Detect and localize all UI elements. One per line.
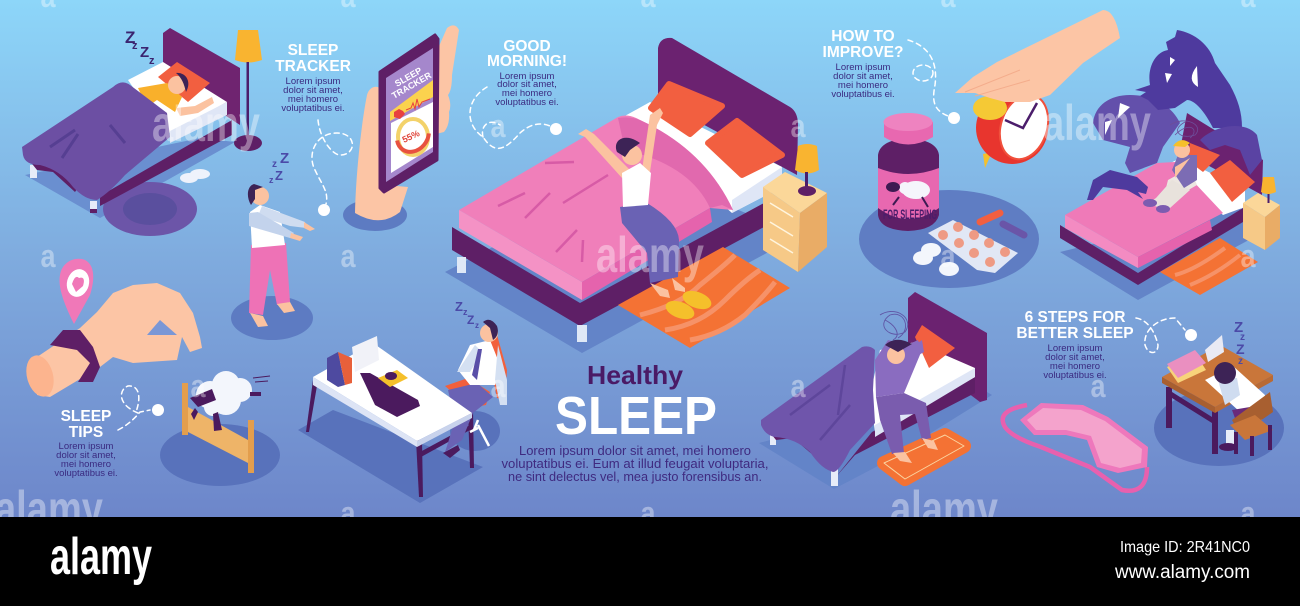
blanket: [761, 346, 875, 472]
title body text: Lorem ipsum dolor sit amet, mei homero: [519, 444, 751, 458]
heading: six steps: mei homero: [1050, 361, 1100, 372]
chair: [1230, 392, 1273, 456]
mattress: [870, 342, 975, 437]
title body text: ne sint delectus vel, mea justo forensibus an.: [508, 470, 762, 484]
zzz: Z: [280, 150, 289, 167]
heading: good morning: Lorem ipsum: [500, 71, 555, 82]
headboard: [163, 28, 240, 125]
illustration: sleeping pills bottle: [859, 113, 1039, 288]
heading: six steps: 6 STEPS FOR: [1025, 309, 1125, 326]
watermarks: a: [190, 368, 206, 404]
title: [502, 360, 768, 484]
mattress: [128, 62, 227, 143]
heading: good morning: mei homero: [502, 88, 552, 99]
heading: sleep tracker: [275, 42, 351, 114]
zzz: Z: [140, 44, 149, 61]
heading: how to improve: mei homero: [838, 80, 888, 91]
bed legs: [30, 165, 97, 213]
sheep: [190, 371, 270, 431]
title body text: [502, 444, 768, 484]
heading: six steps: voluptatibus ei.: [1043, 370, 1107, 381]
bottle: [878, 113, 939, 231]
dot: [318, 204, 330, 216]
illustration: sleep mask: [1003, 403, 1148, 491]
watermarks: a: [340, 495, 356, 531]
finger gap: [147, 320, 177, 335]
chair base: [470, 420, 489, 446]
blanket: [459, 116, 733, 300]
illustration: student asleep at desk: [1154, 319, 1284, 466]
zzz: z: [1238, 356, 1243, 367]
heading: good morning: MORNING!: [487, 53, 567, 70]
illustration: sheep jumping fence: [160, 371, 280, 486]
nightstand: [763, 172, 827, 272]
watermarks: a: [1090, 368, 1106, 404]
zzz: Z: [1234, 319, 1243, 336]
hand: [37, 283, 202, 397]
pillow: [915, 325, 955, 368]
rug: [103, 182, 197, 236]
rug: [618, 247, 790, 348]
heading: sleep tracker: TRACKER: [275, 58, 351, 75]
phone: [380, 35, 438, 192]
heading: sleep tips: [54, 408, 118, 479]
clock foot: [983, 152, 992, 168]
frame: [1060, 208, 1243, 285]
bedside lamp: [795, 144, 819, 196]
illustration: woman waking on big bed: [445, 38, 827, 353]
scribble: [880, 311, 908, 340]
zzz: z: [463, 307, 468, 317]
watermarks: a: [640, 495, 656, 531]
map pin: [60, 259, 93, 324]
calendar: [1205, 335, 1224, 362]
trousers: [249, 243, 290, 315]
bed frame: [100, 120, 232, 206]
mask inner: [1027, 408, 1142, 468]
blanket: [1065, 162, 1223, 268]
desk top: [1162, 345, 1273, 413]
laptop: [360, 373, 420, 417]
band: [50, 330, 100, 382]
tablets: [913, 243, 959, 276]
lamp: [1261, 177, 1276, 203]
bottle: FOR SLEEPING: [883, 206, 937, 222]
scribble: [1170, 121, 1198, 138]
bed frame: [452, 203, 764, 326]
footer logo: alamy: [50, 528, 152, 586]
watermarks: alamy: [596, 227, 704, 283]
heading: sleep tips: voluptatibus ei.: [54, 468, 118, 479]
watermarks: alamy: [152, 96, 260, 152]
zzz: [269, 150, 289, 185]
zzz: [1234, 319, 1245, 367]
zzz: z: [1240, 332, 1245, 343]
illustration: restless man on bed: [759, 292, 992, 489]
monster: [1135, 30, 1242, 128]
heading: sleep tips: TIPS: [69, 424, 103, 441]
blanket: [22, 82, 170, 200]
zzz: z: [269, 175, 274, 185]
frame under blanket: [25, 155, 90, 192]
zzz: [125, 28, 155, 67]
heading: six steps: Lorem ipsum: [1048, 343, 1103, 354]
dot: [948, 112, 960, 124]
watermarks: alamy: [1043, 95, 1151, 151]
wrist end: [22, 352, 58, 400]
monster arm: [1200, 126, 1262, 175]
heading: six steps: dolor sit amet,: [1045, 352, 1105, 363]
illustration: alarm clock and hand: [955, 10, 1120, 168]
zzz: z: [475, 321, 479, 330]
desk legs: [306, 380, 474, 497]
illustration: wrist with fitness band: [22, 259, 202, 400]
site url: www.alamy.com: [1114, 562, 1250, 583]
books: [1167, 350, 1206, 383]
clock bell: [973, 96, 1007, 120]
phone: TRACKER: [390, 70, 434, 101]
heading: sleep tracker: voluptatibus ei.: [281, 103, 345, 114]
frame: [835, 377, 975, 478]
slippers: [180, 169, 210, 183]
watermarks: a: [790, 108, 806, 144]
heading: good morning: [487, 38, 567, 108]
feet: [250, 302, 295, 327]
clock face: [992, 89, 1056, 165]
heading: how to improve: dolor sit amet,: [833, 71, 893, 82]
dashed connector: steps: [1136, 318, 1185, 352]
hand: [955, 10, 1120, 102]
heading: sleep tracker: dolor sit amet,: [283, 85, 343, 96]
heading: how to improve: HOW TO: [831, 28, 895, 45]
heading: how to improve: voluptatibus ei.: [831, 89, 895, 100]
zzz: z: [272, 159, 277, 170]
heading: good morning: GOOD: [503, 38, 551, 55]
zzz: [455, 299, 479, 330]
calendar: [352, 336, 379, 372]
dashed connector: tracker: [312, 120, 352, 204]
pillows: [1187, 143, 1255, 202]
dot: [152, 404, 164, 416]
heading: good morning: voluptatibus ei.: [495, 97, 559, 108]
finger lines: [965, 70, 1030, 96]
mask body: [1020, 403, 1148, 473]
ghost: [1093, 95, 1180, 173]
title: healthy: Healthy: [587, 360, 684, 390]
watermarks: a: [490, 368, 506, 404]
torso: [250, 205, 285, 248]
watermarks: a: [490, 108, 506, 144]
man: [443, 320, 507, 458]
zzz: Z: [275, 168, 283, 183]
hand: [355, 87, 408, 220]
phone: SLEEP: [393, 65, 424, 89]
monster hand: [1087, 170, 1148, 200]
phone: 55%: [401, 128, 421, 145]
zzz: Z: [467, 313, 474, 327]
mattress white: [1167, 158, 1245, 215]
dot: [550, 123, 562, 135]
title body text: voluptatibus ei. Eum at illud feugait voluptaria,: [502, 457, 768, 471]
mask strap: [1003, 405, 1147, 491]
desk legs: [1166, 387, 1218, 454]
woman: [578, 108, 685, 298]
heading: sleep tracker: mei homero: [288, 94, 338, 105]
clock hands: [1005, 103, 1037, 128]
heading: six steps: BETTER SLEEP: [1016, 325, 1134, 342]
headboard: [908, 292, 987, 402]
desk top: [313, 343, 472, 447]
frame under blanket: [764, 425, 850, 472]
head: [248, 184, 269, 205]
heading: good morning: dolor sit amet,: [497, 79, 557, 90]
fingers: [433, 25, 459, 134]
heading: sleep tips: SLEEP: [61, 408, 111, 425]
image id: Image ID: 2R41NC0: [1120, 539, 1250, 556]
girl: [1205, 362, 1265, 451]
dashed connector: tips: [118, 386, 150, 430]
chair: [445, 335, 507, 408]
headboard: [1180, 113, 1263, 195]
illustration: man asleep at office desk: [298, 299, 507, 503]
zzz: z: [132, 40, 138, 52]
nightstand: [1243, 193, 1280, 250]
heading: sleep tips: Lorem ipsum: [59, 441, 114, 452]
girl: [1143, 140, 1197, 213]
heading: sleep tips: dolor sit amet,: [56, 450, 116, 461]
watermarks: a: [940, 238, 956, 274]
zzz: Z: [455, 299, 463, 314]
slippers: [663, 287, 714, 323]
arms: [249, 206, 315, 241]
lamp: [234, 30, 262, 151]
heading: six steps: [1016, 309, 1134, 381]
title: sleep: SLEEP: [555, 386, 717, 446]
dashed connector: improve: [908, 40, 948, 116]
sleeper: [138, 73, 214, 116]
watermarks: alamy: [890, 481, 998, 537]
watermarks: a: [790, 368, 806, 404]
zzz: Z: [1236, 341, 1245, 357]
heading: sleep tracker: SLEEP: [288, 42, 338, 59]
clock body: [976, 92, 1048, 164]
illustration: hand holding phone with sleep tracker: [343, 25, 459, 231]
blister pack: [928, 220, 1018, 273]
man: [875, 340, 938, 463]
illustration: sleepwalking person: [231, 150, 315, 340]
legs: [457, 257, 587, 342]
mattress: [623, 102, 782, 213]
heading: how to improve: [823, 28, 903, 100]
legs: [770, 430, 838, 486]
footer bar: [0, 517, 1300, 606]
fence: [182, 383, 254, 473]
floor mat: [884, 435, 964, 479]
pillow: [158, 62, 210, 102]
illustration: sleeping person in bed with lamp: [22, 28, 262, 236]
watermarks: a: [1240, 238, 1256, 274]
illustration: nightmare monsters and frightened girl on bed: [1060, 30, 1280, 300]
capsules: [980, 213, 1024, 235]
zzz: z: [149, 55, 155, 67]
zzz: Z: [125, 28, 135, 47]
rug: [1160, 238, 1258, 295]
dashed connector: good morning: [470, 87, 550, 148]
heading: sleep tracker: Lorem ipsum: [286, 76, 341, 87]
watermarks: a: [40, 238, 56, 274]
binders: [327, 352, 352, 387]
watermarks: a: [1240, 495, 1256, 531]
dot: [1185, 329, 1197, 341]
heading: how to improve: IMPROVE?: [823, 44, 903, 61]
pillows: [651, 84, 782, 175]
heading: sleep tips: mei homero: [61, 459, 111, 470]
headboard: [658, 38, 798, 175]
watermarks: a: [340, 238, 356, 274]
monster eyes: [1105, 57, 1198, 135]
heading: how to improve: Lorem ipsum: [836, 62, 891, 73]
mouse pad: [378, 370, 408, 387]
